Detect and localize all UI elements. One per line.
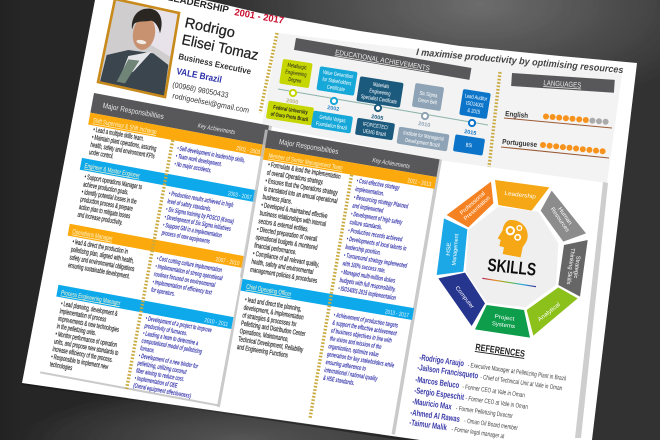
achievements text right column: fiber aiming to reduce cost. [135,368,185,384]
responsibilities text left column: • Support operations Manager to [84,174,143,192]
timeline line [278,89,488,125]
responsibilities text left column: operational budgets & monitored [255,235,318,252]
certificate: value generation: Certificate [326,84,345,94]
achievements text right column: (Overal equipment effectiveness) [133,383,192,401]
certificate: materials engineering [356,76,404,108]
segment: human resources: Resources [549,207,570,233]
achievements text right column: • Leading a team to determine a [142,330,199,348]
responsibilities text left column: financial performance. [254,243,297,257]
certificate: value generation: for Stakeholders [322,76,352,88]
reference: sergio espeschit: - Former CEO at Vale in Oman [465,396,528,411]
institution: federal university [266,101,314,125]
segment: professional presentation: Presentation [463,195,492,222]
institution: bsi: BSI [465,142,473,150]
name and contact details: Business Executive [178,51,252,76]
certificate: six sigma: Six Sigma [419,90,438,100]
reference: ahmed al rawas: -Ahmed Al Rawas [410,407,461,424]
education heading band [294,38,471,80]
reference: sergio espeschit [414,385,529,411]
reference: taimur malik: -Taimur Malik [409,417,448,433]
achievements text right column: • Development of a project to improve [145,315,212,335]
name and contact details: Elisei Tomaz [180,32,260,64]
institution: getulio vargas: Getulio Vargas [319,114,346,125]
achievements text right column: • Six Sigma training by POSCO (Korea) [165,206,234,226]
segment: strategic thinking skills: Thinking Skills [565,248,575,285]
institution: getulio vargas [311,110,353,134]
timeline nodes and years: 2010 [418,121,431,129]
achievements text right column: process of new equipments [160,230,210,246]
language: portuguese: Portuguese [502,137,537,149]
responsibilities text left column: is translated into an annual operational [263,186,338,206]
timeline nodes and years: 2015 [464,129,477,137]
header label: leadership years [167,0,285,27]
achievements text right column: the vision and mission of the [329,335,382,352]
role band: senior management team: 2011 - 2013 [407,178,432,188]
achievements text right column: • Cost-effective strategy [356,178,401,192]
certificate: lead auditor: ISO14001 [465,100,485,110]
segment: analytical: Analytical [537,302,562,323]
institution: federal university: Federal University [273,104,308,117]
achievements text right column: • Development of Six Sigma initiatives [164,214,231,234]
header band [265,130,440,177]
responsibilities text left column: ensuring sustainable development. [67,262,131,281]
column divider [127,140,173,389]
certificate: value generation [316,66,358,96]
segment: human resources: Human [556,206,573,226]
responsibilities text left column: business relationships with internal [259,210,326,229]
institution: institute for managerial development: Development Brazil [405,137,440,149]
achievements text right column: pelletizing, utilizing coconut [136,360,188,377]
achievements text right column: organization, optimize value [328,343,379,359]
timeline nodes and years: 2002 [327,105,340,113]
panel: educational achievements [266,38,491,156]
responsibilities text left column: Pelletizing and Distribution Center [240,320,306,339]
certificate: six sigma: Green Belt [417,97,438,107]
achievements text right column: implementation. [355,186,385,198]
certificate: materials engineering: Engineering [369,88,391,98]
segment: project systems [475,305,530,338]
achievements text right column: • Implementation of OEE [134,375,178,390]
achievements text right column [132,145,246,402]
role band: engineer: Engineer & Master Engineer [84,163,140,180]
achievements text right column: international / national quality [324,367,379,384]
reference: taimur malik [409,417,506,440]
achievements text right column: • Resourcing strategy Planned [353,194,409,211]
responsibilities text left column: health, safety and environmental [251,259,314,276]
reference: rodrigo araujo [419,352,567,383]
responsibilities text left column: • Responsible to implement new [50,354,109,372]
skills octagon chart [437,180,588,338]
education heading band: EDUCATIONAL ACHIEVEMENTS [334,49,431,72]
achievements text right column: budgets with full responsibility. [339,277,397,294]
responsibilities text left column: • lead & direct the production in [72,239,128,256]
segment: hse management: Management [452,233,460,266]
achievements text right column: computational model of pelletizing [141,338,203,356]
role band: chief operating officer: Chief Operating Officer [246,284,292,299]
responsibilities text left column: and increase productivity. [77,212,123,227]
achievements text right column: furnace. [139,345,155,355]
certificate: value generation: Value Generation [322,69,354,81]
responsibilities text left column: management policies & procedures [249,267,318,285]
responsibilities text left column: implementation of process [59,308,107,324]
responsibilities text left column: • Ensures that the Operations strategy [265,178,338,197]
slogan: I maximise productivity by optimising resources [416,47,624,76]
achievements text right column: & HSE standards. [322,375,355,388]
achievements text right column: • Developments of local talents in [346,236,407,253]
panel: languages [501,73,615,158]
panel: responsibilities left [40,93,272,407]
reference: rodrigo araujo: - Executive Manager at Pelletizing Plant in Brazil [467,362,566,383]
responsibilities text left column: • Identify potential losses in the [81,189,137,206]
responsibilities text left column: • lead and direct the planning, [244,297,302,314]
achievements text right column: & support the effective achievement [332,320,398,338]
achievements text right column: • No major accidents. [174,161,212,175]
reference: mauricio max [412,396,514,420]
certificate: lead auditor [459,89,491,119]
responsibilities text left column: • Developed & maintained effective [261,202,328,221]
achievements text right column: • Production results achieved in high [168,190,234,210]
language: english: English [505,109,529,120]
responsibilities text left column: business plans. [262,194,293,206]
references list [409,341,567,440]
skills title: SKILLS [487,255,537,280]
achievements text right column: and implemented [352,203,384,215]
responsibilities text left column [49,127,159,381]
achievements text right column: • Achievement of production targets [333,312,399,330]
responsibilities text left column: safety and environmental obligations [69,254,135,274]
role band: senior management team [263,148,436,189]
responsibilities text left column: pelletizing plan, aligned with health, [70,247,135,266]
achievements text right column: for operators. [150,287,176,299]
certificate: materials engineering: Specialist Certificate [360,94,398,106]
achievements text right column: • Managed multi-million dolars [340,269,396,285]
reference: marcos beluco: - Former CEO at Vale in Oman [462,384,525,400]
role band: operations manager: 2007 - 2010 [215,257,240,267]
reference: ahmed al rawas: - Oman Oil Board member [464,418,518,432]
achievements text right column: productivity of furnaces. [143,323,188,338]
responsibilities text left column: and Engineering Functions [236,344,288,360]
header band: Major Responsibilities [278,137,339,156]
responsibilities text left column: • Compliance of all relevant quality, [252,251,320,269]
role band: process engineering manager: 2010 - 2011 [204,318,229,328]
role band: process engineering manager [56,285,233,329]
segment: professional presentation [447,182,493,227]
responsibilities text left column: of overall Operations strategy. [266,170,324,187]
octagon centre [466,207,558,307]
achievements text right column: • Production records achieved [347,227,403,244]
responsibilities text left column: • Maintain plant operations, assuring [91,134,157,153]
achievements text right column: • Development of high safety [350,211,403,227]
achievements text right column: • Implementation of efficiency test [152,279,213,297]
achievements text right column: • Development of a new binder for [138,353,199,371]
segment: hse management: HSE [446,242,453,256]
role band: operations manager [68,224,245,268]
responsibilities text left column: under control. [88,149,114,161]
name and contact details: VALE Brazil [176,66,223,85]
responsibilities text left column: Operations, Maintenance, [239,328,289,344]
responsibilities text left column: in the pelletizing units. [56,323,97,338]
column divider [310,175,352,419]
achievements text right column: with 100% success rate. [342,261,386,275]
responsibilities text left column [236,162,342,364]
portrait photo [96,0,180,99]
segment: human resources [541,191,586,242]
certificate: six sigma [412,83,444,111]
achievements text right column: • Team work development. [175,153,223,169]
achievements text right column: generation for key stakeholders while [326,351,395,370]
responsibilities text left column: health, safety and environment KPIs [90,142,155,161]
responsibilities text left column: action plan to mitigate losses [78,204,131,221]
reference: marcos beluco [415,374,526,400]
responsibilities text left column: of strategies & processes for [242,313,297,329]
header band: Major Responsibilities [102,101,165,121]
institution: institute for managerial development: Institute for Managerial [403,130,444,143]
certificate: metallurgic engineering: Metallurgic [287,62,308,72]
certificate: materials engineering: Materials [372,81,390,91]
institution: ifop cetec uemg: IFOP/CETEC/ [362,121,389,132]
segment: computer [438,273,485,326]
reference: jailson francisqueto: -Jailson Francisqueto [417,362,479,381]
responsibilities text left column: • Lead planning, development & [60,301,118,318]
responsibilities text left column: improvements & new technologies [57,316,120,334]
achievements text right column [322,178,424,394]
icon: head with gears [498,220,528,257]
achievements text right column: • Cost cutting culture implementation [156,255,223,275]
certificate: lead auditor: & 2015 [467,107,481,116]
responsibilities text left column: development, & implementation [243,305,304,322]
achievements text right column: • Turnaround strategy implemented [343,252,408,270]
responsibilities text left column: • Formulate & lead the implementation [267,162,341,181]
header label: leadership years: 2001 - 2017 [233,7,285,27]
segment: analytical [527,287,578,336]
responsibilities text left column: Technical Development, Reliability [238,336,304,354]
reference: marcos beluco: -Marcos Beluco [415,374,460,391]
reference: mauricio max: - Former Pelletizing Director [455,406,513,420]
header band: Key Achievments [372,157,411,170]
achievements text right column: • Implementation of strong operational [155,263,223,283]
segment: computer: Computer [454,285,475,310]
segment: project systems: Project [494,314,515,323]
reference: sergio espeschit: -Sergio Espeschit [414,385,465,402]
achievements text right column: leadership position. [345,244,382,257]
segment: professional presentation: Professional [459,191,487,217]
achievements text right column: • Self-development in leadership skills, [177,145,246,165]
institution: federal university: of Ouro Preto Brazil [270,111,309,124]
responsibilities text left column: • Directed preparation of overall [256,226,317,244]
segment: strategic thinking skills [558,240,588,297]
role band: chief operating officer: 2013 - 2017 [384,309,410,319]
responsibilities text left column: technologies [49,361,73,373]
languages heading band: LANGUAGES [543,78,582,90]
role band: shift supervisor: Shift Supervisor & Shift Incharge [92,118,157,136]
certificate: metallurgic engineering [279,59,313,88]
header band [90,93,269,145]
achievements text right column: • ISO14001-2015 implementation [338,285,397,303]
responsibilities text left column: • Monitor performance of operation [55,331,118,350]
segment: project systems: Systems [491,321,515,330]
institution: getulio vargas: Foundation Brazil [315,120,347,132]
role band: shift supervisor: 2001 - 2003 [236,146,261,156]
reference: jailson francisqueto [417,362,563,393]
institution: ifop cetec uemg [355,118,395,140]
segment: strategic thinking skills: Strategic [572,255,581,279]
institution: bsi [453,134,485,156]
references heading: REFERENCES [475,341,526,359]
institution: ifop cetec uemg: UEMG Brazil [362,128,386,139]
institution: institute for managerial development [396,127,450,151]
achievements text right column: • Support GM in a implementation [162,222,223,240]
role band: process engineering manager: Process Engineering Manager [60,290,121,308]
certificate: metallurgic engineering: Degree [288,76,302,85]
name and contact details [172,15,260,115]
achievements text right column: culture standards. [349,219,383,232]
responsibilities text left column: increase efficiency of the process. [52,346,114,365]
role band: senior management team: Member of Senior Management Team [268,153,343,172]
responsibilities text left column: achieve production goals. [82,181,129,197]
achievements text right column: of business objectives in line with [330,328,393,345]
responsibilities text left column: sectors & external entities. [258,218,309,234]
segment: leadership: Leadership [504,191,536,201]
panel: responsibilities middle [218,129,442,435]
reference: mauricio max: -Mauricio Max [412,396,453,412]
reference: jailson francisqueto: - Chief of Technical Unit at Vale in Oman [480,374,563,393]
role band: chief operating officer [241,279,414,320]
role band: shift supervisor [88,113,265,157]
responsibilities text left column: units, and propose new standards to [53,339,119,358]
responsibilities text left column: • Lead a multiple skills team. [93,127,145,143]
name and contact details: Rodrigo [183,15,236,42]
timeline nodes and years [286,90,477,137]
rainbow underline [482,278,536,287]
role band: engineer [80,158,257,202]
achievements text right column: level of safety standards. [167,198,212,214]
certificate: lead auditor: Lead Auditor [464,93,488,103]
responsibilities text left column: production process & prepare [80,196,133,213]
reference: rodrigo araujo: -Rodrigo Araujo [419,352,465,369]
name and contact details: (00968) 98050433 [172,80,229,100]
segment: leadership [495,180,549,211]
role band: engineer: 2003 - 2007 [227,191,252,201]
achievements text right column: ensuring adherence to [325,359,367,373]
timeline nodes and years: 2000 [286,98,299,106]
timeline nodes and years: 2005 [371,114,384,122]
name and contact details: rodrigoelisei@gmail.com [172,91,250,115]
reference: ahmed al rawas [410,407,519,432]
role band: operations manager: Operations Manager [72,229,113,243]
divider: education left [260,33,277,113]
segment: hse management [437,218,467,275]
header band: Key Achievments [197,123,236,136]
divider: education right [489,72,500,167]
certificate: metallurgic engineering: Engineering [285,69,307,79]
achievements text right column: routines focused on environmental [153,271,216,290]
